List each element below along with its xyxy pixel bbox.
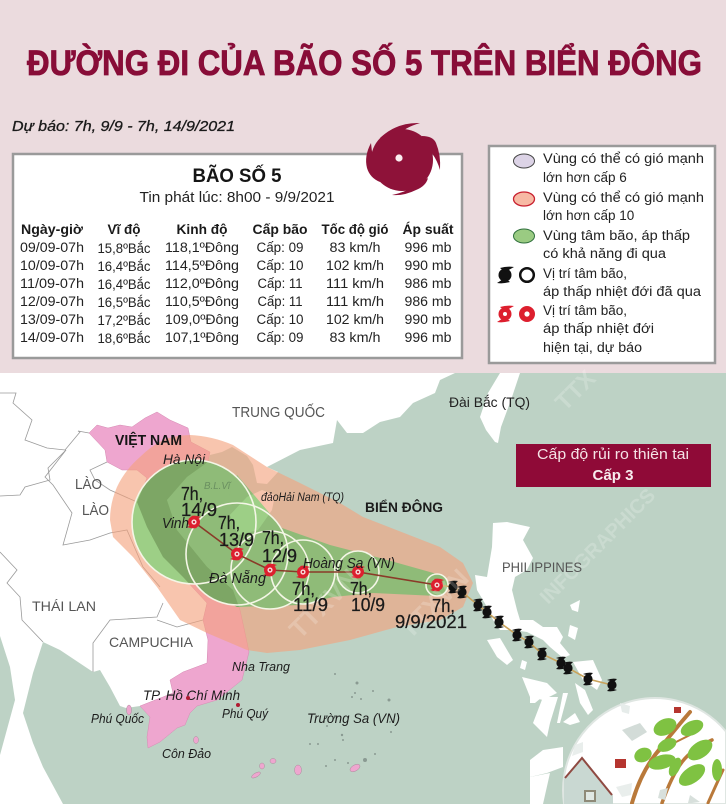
date label 14/9: 14/9: [181, 500, 217, 520]
foliage: [632, 715, 722, 790]
Taiwan: [480, 373, 520, 443]
legend: current and forecast positions: áp thấp nhiệt đới: [543, 321, 654, 336]
legend: past positions: [497, 266, 702, 299]
map labels: Phú Quý: [222, 706, 269, 721]
table header row: Tốc độ gió: [322, 221, 388, 237]
table row 14/09: 18,6ºBắc: [98, 331, 151, 346]
date label 10/9: [350, 579, 385, 615]
panel: storm data table: [13, 154, 462, 358]
date label 12/9: 7h,: [262, 528, 284, 548]
map labels: TRUNG QUỐC: [232, 403, 325, 421]
map labels: Trường Sa (VN): [307, 710, 400, 726]
watermarks: INFOGRAPHICS: [536, 485, 660, 609]
header background: [0, 0, 726, 373]
table row 14/09: Cấp: 09: [256, 330, 304, 345]
watermarks: TTXVN: [393, 563, 475, 644]
table row 13/09: 13/09-07h: [20, 312, 84, 327]
map labels: Đài Bắc (TQ): [449, 395, 530, 410]
illustration: storm scene: [563, 698, 726, 804]
table header row: Cấp bão: [252, 221, 308, 237]
watermarks: [283, 365, 660, 644]
watermarks: TTX: [550, 365, 601, 416]
icon: cyclone: [366, 123, 440, 195]
date label 11/9: 11/9: [293, 595, 328, 615]
table row 14/09: 83 km/h: [330, 330, 380, 345]
map labels: Vinh: [162, 516, 189, 532]
legend: wind over level 10: lớn hơn cấp 10: [543, 208, 634, 223]
table row 11/09: Cấp: 11: [258, 276, 302, 291]
branches: [632, 712, 723, 803]
date label 11/9: [292, 579, 328, 615]
forecast track line: [194, 522, 437, 585]
country borders: [0, 393, 203, 672]
legend: past positions: Vị trí tâm bão,: [543, 266, 627, 281]
date label 11/9: 7h,: [292, 579, 315, 599]
legend: current and forecast positions: [497, 303, 654, 355]
table row 11/09: 111 km/h: [326, 276, 384, 291]
callout: disaster risk level: Cấp 3: [592, 467, 634, 484]
forecast storm positions: [187, 516, 444, 591]
Vietnam: [89, 412, 249, 748]
table row 12/09: [20, 294, 452, 310]
forecast radius circles: [132, 460, 448, 609]
map labels: Đà Nẵng: [209, 570, 266, 587]
legend: current and forecast positions: hiện tại, dự báo: [543, 340, 642, 355]
table row 14/09: 996 mb: [404, 330, 452, 345]
map labels: Hoàng Sa (VN): [303, 556, 395, 572]
past track line: [437, 585, 612, 685]
table heading: BÃO SỐ 5: [192, 165, 282, 187]
table row 12/09: 986 mb: [404, 294, 452, 309]
zone: wind over level 10: [110, 435, 473, 653]
table row 12/09: 12/09-07h: [20, 294, 84, 309]
table row 12/09: 110,5ºĐông: [165, 294, 239, 309]
table header row: Ngày-giờ: [21, 221, 83, 237]
map labels: LÀO: [82, 502, 109, 519]
date label 10/9: 7h,: [350, 579, 372, 599]
callout: disaster risk level: [516, 444, 711, 487]
legend: current and forecast positions: Vị trí tâm bão,: [543, 303, 627, 318]
table header row: Áp suất: [402, 221, 454, 237]
table row 10/09: [20, 258, 452, 274]
table row 11/09: 986 mb: [404, 276, 452, 291]
callout: disaster risk level: Cấp độ rủi ro thiên tai: [537, 446, 689, 463]
Philippines: [475, 522, 602, 804]
table header row: Vĩ độ: [108, 221, 140, 237]
legend: storm centre zone: Vùng tâm bão, áp thấp: [543, 228, 690, 243]
table row 09/09: 09/09-07h: [20, 240, 84, 255]
city dots: [186, 696, 240, 707]
date label 10/9: 10/9: [351, 595, 385, 615]
date label 9/9/2021: 7h,: [432, 596, 455, 616]
map labels: Phú Quốc: [91, 711, 144, 726]
date label 9/9/2021: [395, 596, 467, 632]
date label 12/9: [262, 528, 297, 566]
legend: wind over level 6: [514, 151, 704, 185]
map labels: CAMPUCHIA: [109, 634, 194, 650]
table row 13/09: [20, 312, 452, 328]
table row 13/09: 990 mb: [404, 312, 452, 327]
table header row: Kinh độ: [176, 221, 228, 237]
table row 14/09: [20, 330, 452, 346]
table row 11/09: 16,4ºBắc: [98, 277, 151, 292]
flying debris: [572, 703, 700, 803]
map labels: TP. Hồ Chí Minh: [143, 687, 240, 703]
past storm positions: [448, 581, 617, 691]
table header row: [21, 221, 454, 237]
table row 09/09: 83 km/h: [330, 240, 380, 255]
Hainan island: [230, 490, 275, 535]
table row 09/09: 118,1ºĐông: [165, 240, 239, 255]
panel: legend: [489, 146, 715, 363]
table row 09/09: Cấp: 09: [256, 240, 304, 255]
table row 14/09: 107,1ºĐông: [165, 330, 239, 345]
house: [564, 758, 613, 804]
legend: wind over level 10: [514, 190, 704, 223]
zone: storm centre cone: [132, 460, 448, 609]
table row 09/09: 996 mb: [404, 240, 452, 255]
map labels: đảoHải Nam (TQ): [261, 492, 344, 504]
legend: past positions: áp thấp nhiệt đới đã qua: [543, 284, 702, 299]
date label 9/9/2021: 9/9/2021: [395, 612, 467, 632]
table row 13/09: 109,0ºĐông: [165, 312, 239, 327]
small islets: [309, 673, 392, 767]
date label 13/9: 13/9: [219, 530, 254, 550]
map labels: LÀO: [75, 476, 102, 493]
table row 10/09: 114,5ºĐông: [165, 258, 239, 273]
table row 13/09: 17,2ºBắc: [98, 313, 151, 328]
legend: wind over level 6: Vùng có thể có gió mạnh: [543, 151, 704, 166]
mainland: [0, 373, 455, 804]
map labels: THÁI LAN: [32, 598, 96, 614]
map labels: Nha Trang: [232, 659, 291, 674]
table row 11/09: 112,0ºĐông: [165, 276, 239, 291]
bulletin time: Tin phát lúc: 8h00 - 9/9/2021: [140, 190, 334, 206]
table row 14/09: 14/09-07h: [20, 330, 84, 345]
table row 12/09: 111 km/h: [326, 294, 384, 309]
date label 14/9: 7h,: [181, 484, 203, 504]
table row 13/09: Cấp: 10: [256, 312, 304, 327]
date label 13/9: [218, 513, 254, 550]
table row 12/09: 16,5ºBắc: [98, 295, 151, 310]
legend: wind over level 10: Vùng có thể có gió mạnh: [543, 190, 704, 205]
legend: storm centre zone: [514, 228, 690, 261]
map labels: PHILIPPINES: [502, 559, 582, 575]
map labels: VIỆT NAM: [115, 431, 182, 449]
map labels: Côn Đảo: [162, 746, 211, 761]
table row 13/09: 102 km/h: [326, 312, 384, 327]
table row 10/09: 102 km/h: [326, 258, 384, 273]
map: [0, 365, 726, 804]
table row 10/09: Cấp: 10: [256, 258, 304, 273]
date label 14/9: [181, 484, 217, 520]
table row 10/09: 10/09-07h: [20, 258, 84, 273]
date label 13/9: 7h,: [218, 513, 240, 533]
table row 09/09: [20, 240, 452, 256]
legend: wind over level 6: lớn hơn cấp 6: [543, 170, 627, 185]
map labels: B.L.Vĩ: [204, 481, 232, 492]
table row 09/09: 15,8ºBắc: [98, 241, 151, 256]
table row 11/09: [20, 276, 452, 292]
legend: storm centre zone: có khả năng đi qua: [543, 246, 667, 261]
map labels: BIỂN ĐÔNG: [365, 498, 443, 515]
map labels: Hà Nội: [163, 451, 206, 467]
date label 12/9: 12/9: [262, 546, 297, 566]
table row 10/09: 16,4ºBắc: [98, 259, 151, 274]
table row 11/09: 11/09-07h: [20, 276, 84, 291]
southern islands: [126, 705, 361, 779]
map labels: [32, 395, 582, 761]
table row 12/09: Cấp: 11: [258, 294, 302, 309]
table row 10/09: 990 mb: [404, 258, 452, 273]
watermarks: TTXVN: [283, 563, 365, 644]
forecast period: Dự báo: 7h, 9/9 - 7h, 14/9/2021: [12, 118, 235, 135]
